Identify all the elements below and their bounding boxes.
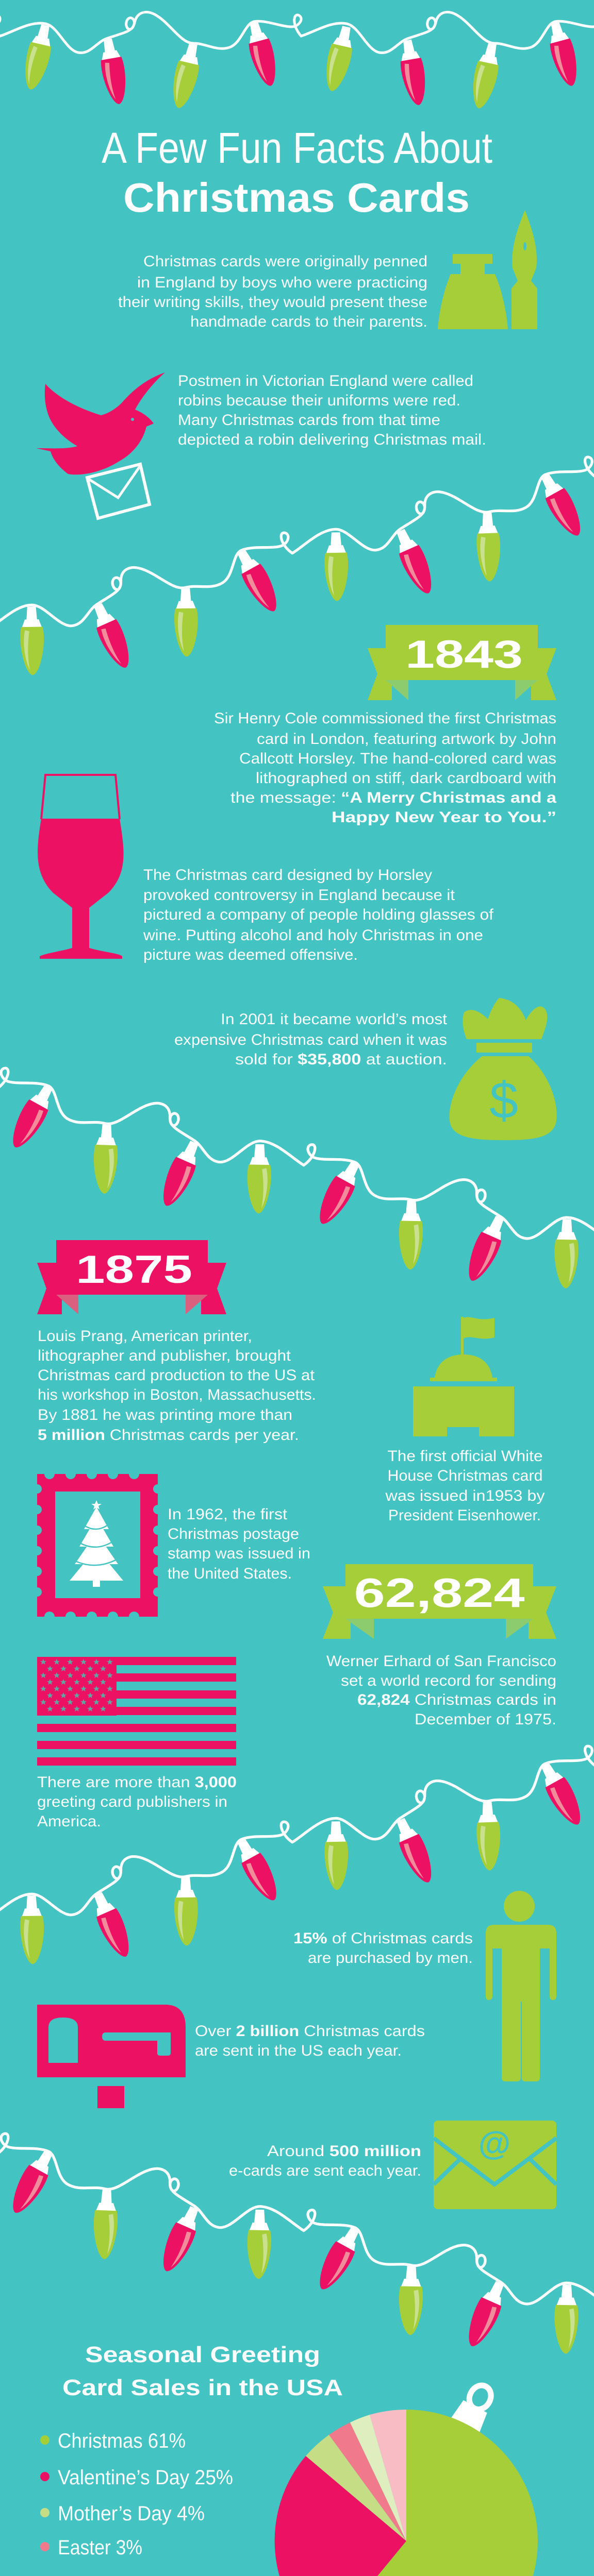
fact: $35,800 auction bbox=[174, 1011, 448, 1068]
icon: american flag bbox=[37, 1657, 236, 1766]
fact: controversy bbox=[143, 867, 494, 963]
banner: 1875 bbox=[37, 1240, 226, 1314]
fact: Louis Prang: Louis Prang, American printer, bbox=[38, 1328, 252, 1345]
fact: Louis Prang: 5 million Christmas cards per year. bbox=[38, 1427, 299, 1444]
garland: diagonal lights 4 bbox=[0, 2054, 594, 2536]
banner: 62,824: 62,824 bbox=[354, 1570, 525, 1616]
legend: seasonal sales bbox=[40, 2430, 233, 2576]
icon: money bag: $ bbox=[489, 1072, 518, 1129]
fact: boys penned cards: their writing skills, they would present these bbox=[118, 294, 427, 311]
fact: Henry Cole first card: Sir Henry Cole commissioned the first Christmas bbox=[214, 710, 556, 727]
banner: 62,824 bbox=[323, 1564, 556, 1639]
fact: Werner Erhard record: Werner Erhard of San Francisco bbox=[326, 1653, 556, 1670]
fact: postmen called robins: Postmen in Victorian England were called bbox=[178, 372, 473, 389]
garland: diagonal lights 2 bbox=[0, 988, 594, 1470]
banner: 1875: 1875 bbox=[76, 1248, 192, 1292]
icon: man bbox=[486, 1891, 556, 2081]
banner: 1843: 1843 bbox=[405, 633, 523, 676]
title: A Few Fun Facts About bbox=[102, 124, 492, 172]
icon: email envelope bbox=[434, 2121, 556, 2209]
fact: Werner Erhard record: set a world record for sending bbox=[341, 1672, 556, 1689]
icon: money bag bbox=[450, 998, 557, 1140]
heading: seasonal greeting card sales: Card Sales in the USA bbox=[62, 2375, 343, 2400]
fact: boys penned cards: handmade cards to their parents. bbox=[190, 313, 427, 330]
title: Christmas Cards bbox=[123, 175, 470, 221]
icon: mailbox bbox=[37, 2005, 186, 2108]
fact: controversy: The Christmas card designed by Horsley bbox=[143, 867, 432, 884]
legend: seasonal sales: Christmas 61% bbox=[58, 2430, 186, 2452]
fact: 1962 postage stamp: Christmas postage bbox=[168, 1526, 299, 1543]
fact: controversy: provoked controversy in England because it bbox=[143, 887, 455, 904]
fact: White House card bbox=[385, 1448, 544, 1524]
fact: boys penned cards: in England by boys who were practicing bbox=[137, 274, 427, 291]
fact: 15% by men bbox=[293, 1930, 473, 1967]
title bbox=[102, 124, 492, 221]
fact: 500 million e-cards: e-cards are sent each year. bbox=[229, 2162, 421, 2179]
heading: seasonal greeting card sales: Seasonal Greeting bbox=[85, 2342, 320, 2367]
legend: seasonal sales: Easter 3% bbox=[58, 2536, 142, 2559]
fact: 2 billion cards: are sent in the US each year. bbox=[195, 2042, 402, 2059]
fact: Henry Cole first card: the message: “A Merry Christmas and a bbox=[230, 789, 556, 806]
fact: 1962 postage stamp: In 1962, the first bbox=[168, 1506, 288, 1523]
fact: 1962 postage stamp: stamp was issued in bbox=[168, 1545, 310, 1562]
garland: diagonal lights 1 bbox=[0, 378, 594, 856]
fact: postmen called robins bbox=[178, 372, 486, 448]
fact: Louis Prang: By 1881 he was printing more than bbox=[38, 1406, 292, 1423]
heading: seasonal greeting card sales bbox=[62, 2342, 343, 2400]
banner: 1843 bbox=[368, 625, 556, 700]
fact: Henry Cole first card bbox=[214, 710, 556, 826]
fact: 3,000 publishers: America. bbox=[37, 1813, 101, 1830]
fact: White House card: The first official White bbox=[388, 1448, 542, 1465]
fact: Louis Prang: Christmas card production to the US at bbox=[38, 1367, 315, 1384]
fact: White House card: was issued in1953 by bbox=[385, 1487, 544, 1504]
fact: $35,800 auction: sold for $35,800 at auction. bbox=[235, 1051, 447, 1068]
icon: wine glass bbox=[38, 775, 124, 959]
fact: 1962 postage stamp bbox=[168, 1506, 310, 1582]
fact: Louis Prang: lithographer and publisher, brought bbox=[38, 1347, 291, 1364]
fact: 500 million e-cards: Around 500 million bbox=[267, 2143, 421, 2160]
fact: postmen called robins: depicted a robin delivering Christmas mail. bbox=[178, 431, 486, 448]
fact: Werner Erhard record: December of 1975. bbox=[415, 1711, 556, 1728]
fact: Werner Erhard record: 62,824 Christmas cards in bbox=[357, 1691, 556, 1708]
fact: Werner Erhard record bbox=[326, 1653, 556, 1728]
icon: postage stamp with tree bbox=[32, 1469, 162, 1622]
fact: Henry Cole first card: card in London, featuring artwork by John bbox=[257, 731, 556, 748]
icon: white house bbox=[413, 1317, 514, 1436]
fact: Louis Prang: his workshop in Boston, Massachusetts. bbox=[38, 1386, 316, 1403]
fact: Henry Cole first card: Happy New Year to You.” bbox=[332, 809, 556, 826]
legend: seasonal sales: Valentine’s Day 25% bbox=[58, 2466, 233, 2489]
fact: 3,000 publishers bbox=[37, 1774, 237, 1830]
fact: 2 billion cards: Over 2 billion Christmas cards bbox=[195, 2023, 425, 2040]
fact: 3,000 publishers: greeting card publishers in bbox=[37, 1793, 227, 1810]
fact: Henry Cole first card: Callcott Horsley. The hand-colored card was bbox=[239, 750, 556, 767]
fact: postmen called robins: robins because their uniforms were red. bbox=[178, 392, 460, 409]
fact: Louis Prang bbox=[38, 1328, 316, 1444]
icon: email envelope: @ bbox=[478, 2125, 510, 2162]
garland: top lights bbox=[0, 12, 594, 111]
fact: 1962 postage stamp: the United States. bbox=[168, 1565, 292, 1582]
fact: White House card: House Christmas card bbox=[388, 1467, 542, 1484]
legend: seasonal sales: Mother’s Day 4% bbox=[58, 2502, 205, 2525]
fact: controversy: wine. Putting alcohol and holy Christmas in one bbox=[143, 927, 483, 944]
icon: inkwell and pen bbox=[438, 210, 537, 329]
fact: controversy: pictured a company of people holding glasses of bbox=[143, 906, 494, 923]
fact: Henry Cole first card: lithographed on stiff, dark cardboard with bbox=[256, 770, 556, 787]
fact: 15% by men: 15% of Christmas cards bbox=[293, 1930, 473, 1947]
fact: 500 million e-cards bbox=[229, 2143, 421, 2179]
fact: 3,000 publishers: There are more than 3,000 bbox=[37, 1774, 237, 1791]
icon: dove with envelope bbox=[36, 372, 165, 518]
fact: postmen called robins: Many Christmas cards from that time bbox=[178, 412, 440, 429]
fact: boys penned cards bbox=[118, 253, 427, 330]
pie chart: seasonal sales ornament bbox=[275, 2379, 538, 2576]
fact: White House card: President Eisenhower. bbox=[388, 1507, 541, 1524]
fact: 2 billion cards bbox=[195, 2023, 425, 2059]
fact: 15% by men: are purchased by men. bbox=[308, 1950, 473, 1967]
garland: diagonal lights 3 bbox=[0, 1667, 594, 2145]
fact: $35,800 auction: In 2001 it became world’s most bbox=[221, 1011, 448, 1028]
fact: boys penned cards: Christmas cards were originally penned bbox=[143, 253, 427, 270]
fact: controversy: picture was deemed offensive. bbox=[143, 946, 358, 963]
fact: $35,800 auction: expensive Christmas card when it was bbox=[174, 1031, 447, 1048]
